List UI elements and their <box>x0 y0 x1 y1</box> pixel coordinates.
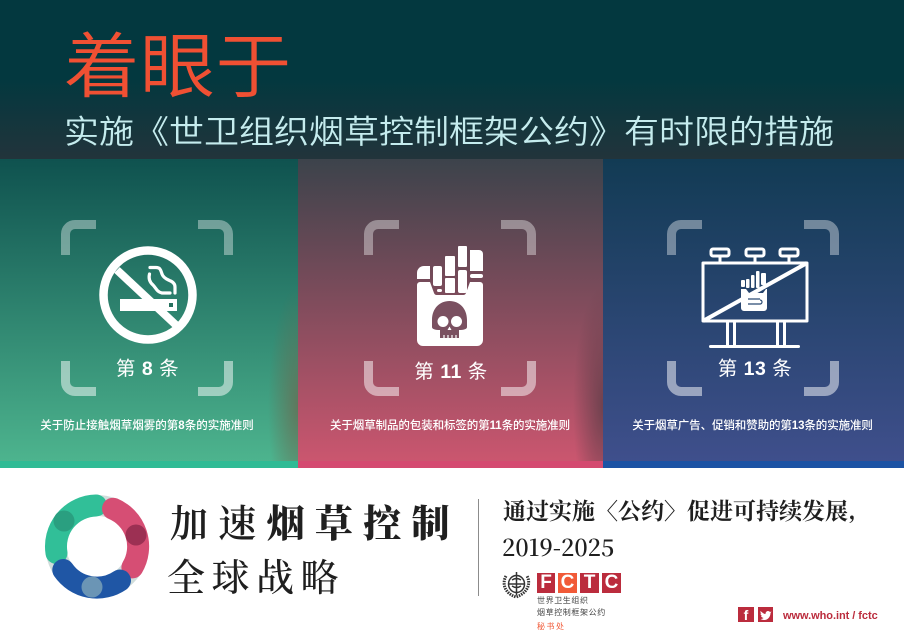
caption: article 13: 关于烟草广告、促销和赞助的第13条的实施准则 <box>632 420 873 432</box>
corner brackets: article 11 <box>364 220 536 396</box>
logo ring <box>45 494 150 599</box>
FCTC logo: C <box>561 572 574 593</box>
divider <box>478 499 479 596</box>
FCTC logo: F <box>540 572 552 593</box>
label: article 13: 第 13 条 <box>718 358 792 380</box>
icon: facebook <box>738 607 754 622</box>
panel: article 8 <box>0 159 298 468</box>
corner brackets: article 8 <box>61 220 233 396</box>
icon: no smoking <box>99 246 197 344</box>
panel: article 13 <box>603 159 904 468</box>
panel shadow <box>248 279 298 461</box>
caption: article 8: 关于防止接触烟草烟雾的第8条的实施准则 <box>40 420 254 432</box>
website url: www.who.int / fctc <box>783 610 878 622</box>
title: 着眼于 <box>64 27 291 107</box>
label: article 11: 第 11 条 <box>414 361 488 383</box>
FCTC text: framework convention: 烟草控制框架公约 <box>537 608 606 617</box>
icon: cigarette pack with skull <box>417 246 483 346</box>
icon: WHO emblem <box>502 572 530 598</box>
panel: article 11 <box>298 159 603 468</box>
icon: facebook: f <box>744 607 748 623</box>
accent bar <box>602 461 904 468</box>
subtitle: 实施《世卫组织烟草控制框架公约》有时限的措施 <box>64 115 834 150</box>
FCTC logo <box>537 572 621 593</box>
strategy subtitle line 1: 通过实施〈公约〉促进可持续发展, <box>503 493 856 526</box>
heading: global strategy line 1: 加速烟草控制 <box>170 493 460 548</box>
FCTC logo: T <box>584 572 595 593</box>
label: article 8: 第 8 条 <box>116 358 179 380</box>
icon: billboard <box>702 248 808 348</box>
accent bar <box>298 461 603 468</box>
caption: article 11: 关于烟草制品的包装和标签的第11条的实施准则 <box>330 420 570 432</box>
heading: global strategy line 2: 全球战略 <box>167 547 345 602</box>
accent bar <box>0 461 298 468</box>
header band <box>0 0 904 159</box>
FCTC text: secretariat: 秘书处 <box>537 622 566 631</box>
corner brackets: article 13 <box>667 220 839 396</box>
FCTC logo: C <box>605 572 618 593</box>
strategy subtitle line 2: 2019-2025 <box>502 530 614 563</box>
panel shadow <box>553 279 603 461</box>
FCTC text: WHO: 世界卫生组织 <box>537 596 589 605</box>
icon: twitter <box>758 607 773 622</box>
